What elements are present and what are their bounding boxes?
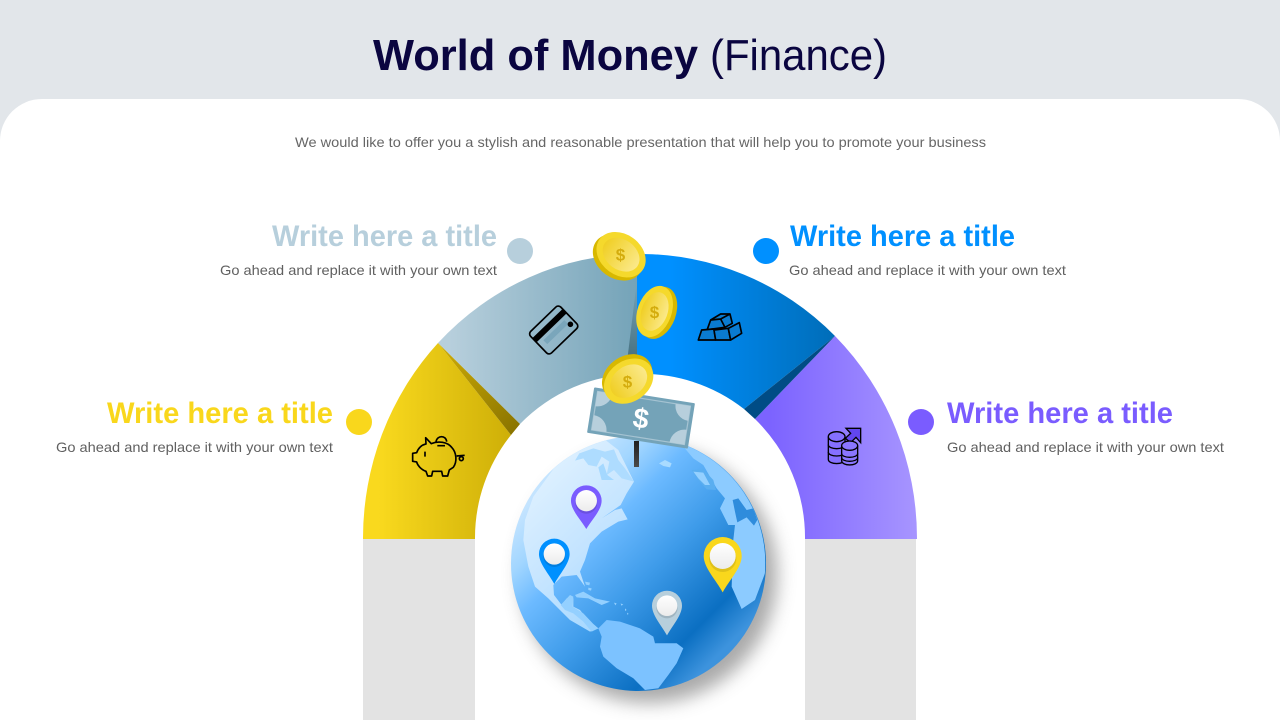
coin: top: $: [616, 246, 626, 264]
globe: [511, 436, 766, 691]
banknote sign: $: [631, 402, 651, 435]
pin: purple: [571, 485, 602, 529]
heading and text: purple: Go ahead and replace it with your own text: [947, 439, 1224, 455]
heading and text: yellow: Write here a title: [107, 397, 333, 430]
subtitle: We would like to offer you a stylish and reasonable presentation that will help you to promote your business: [295, 134, 986, 150]
coin: middle: $: [650, 303, 660, 322]
coin: bottom: [593, 345, 663, 413]
fold shadow: blue: [744, 336, 835, 419]
heading and text: grey: [220, 220, 497, 278]
heading and text: blue: [789, 220, 1066, 278]
marker dot: purple: [908, 409, 934, 435]
pin: blue: [539, 539, 570, 584]
header band: [0, 0, 1280, 140]
coin: bottom: $: [623, 372, 633, 392]
fold shadow: grey: [627, 280, 637, 362]
fold shadow: yellow: [438, 343, 520, 435]
arc segment: purple: [755, 336, 917, 539]
heading and text: yellow: Go ahead and replace it with your own text: [56, 439, 333, 455]
heading and text: purple: Write here a title: [947, 397, 1173, 430]
heading and text: grey: Write here a title: [272, 220, 497, 253]
sign pole: [634, 441, 639, 467]
marker dot: yellow: [346, 409, 372, 435]
icon: credit card: [528, 305, 579, 355]
left grey column: [363, 539, 475, 720]
icon: gold bars: [698, 314, 742, 340]
globe shadow: [521, 447, 777, 703]
arc segment: grey: [438, 254, 637, 424]
continents: [523, 438, 765, 690]
right grey column: [805, 539, 916, 720]
icon: piggy bank: [413, 437, 465, 476]
coin: middle: [629, 280, 684, 344]
pin: grey: [652, 591, 682, 635]
title: World of Money: [373, 31, 699, 80]
marker dot: blue: [753, 238, 779, 264]
marker dot: grey: [507, 238, 533, 264]
heading and text: blue: Go ahead and replace it with your own text: [789, 262, 1066, 278]
pin: yellow: [704, 537, 742, 592]
heading and text: purple: [947, 397, 1224, 455]
heading and text: blue: Write here a title: [790, 220, 1015, 253]
title: (Finance): [710, 31, 887, 80]
arc segment: blue: [637, 254, 835, 409]
heading and text: yellow: [56, 397, 333, 455]
heading and text: grey: Go ahead and replace it with your own text: [220, 262, 497, 278]
icon: coin stacks with arrow: [828, 428, 861, 465]
coin: top: [584, 222, 655, 290]
banknote sign: [587, 387, 695, 449]
arc segment: yellow: [363, 343, 511, 539]
